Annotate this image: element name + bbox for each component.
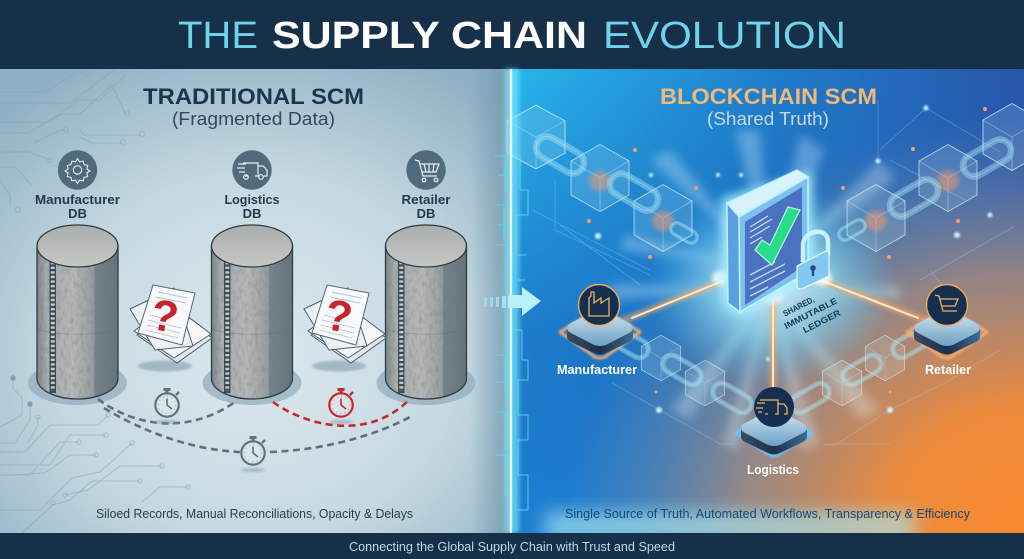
delay path: manufacturer to retailer <box>104 408 410 452</box>
caption: blockchain benefits: Single Source of Truth, Automated Workflows, Transparency & Efficiency <box>565 507 971 521</box>
label: manufacturer: Manufacturer <box>557 362 637 377</box>
label: manufacturer DB: Manufacturer <box>35 192 120 207</box>
blockchain cube row <box>507 104 1024 252</box>
orange dots <box>587 107 987 394</box>
arrow: transition <box>484 287 541 316</box>
chain links lower <box>607 325 934 416</box>
subheading: shared truth: (Shared Truth) <box>707 109 829 129</box>
label: logistics DB: DB <box>243 206 261 221</box>
icon: cart <box>935 295 958 311</box>
footer bar <box>0 533 1024 559</box>
left edge shading <box>470 69 512 533</box>
node: manufacturer <box>560 284 640 358</box>
left panel background <box>0 69 512 533</box>
label: shared immutable ledger: IMMUTABLE <box>783 296 839 331</box>
icon: document stack with question mark 2 <box>304 285 386 372</box>
label: logistics: Logistics <box>747 462 799 477</box>
icon: ledger book <box>722 170 814 318</box>
delay path: manufacturer to logistics <box>98 399 235 423</box>
lower cubes <box>641 335 905 406</box>
divider: glowing circuit line <box>495 69 528 533</box>
delay path: logistics to retailer <box>273 399 410 426</box>
title: SUPPLY CHAIN <box>272 15 587 57</box>
cylinder: logistics database <box>202 225 302 405</box>
icon: stopwatch long delay <box>241 436 265 472</box>
network lines <box>532 100 1015 445</box>
label: retailer: Retailer <box>925 362 971 377</box>
icon: padlock <box>797 232 829 289</box>
icon: factory <box>589 292 609 316</box>
right panel background <box>512 69 1024 542</box>
chain links upper <box>532 132 1015 245</box>
subheading: fragmented data: (Fragmented Data) <box>172 109 335 129</box>
caption: traditional drawbacks: Siloed Records, Manual Reconciliations, Opacity & Delays <box>96 507 413 521</box>
sparkle dots <box>595 106 992 413</box>
header bar <box>0 0 1024 69</box>
title: EVOLUTION <box>603 15 846 57</box>
label: retailer DB <box>402 192 450 221</box>
icon: green check mark <box>755 207 800 265</box>
label: shared immutable ledger: SHARED, <box>781 294 816 318</box>
label: manufacturer DB: DB <box>68 206 87 221</box>
footer tagline: Connecting the Global Supply Chain with Trust and Speed <box>349 540 675 554</box>
connection beams <box>620 270 930 390</box>
node: logistics <box>736 387 812 456</box>
icon: stopwatch red <box>329 388 353 424</box>
cylinder: manufacturer database <box>28 225 127 405</box>
label: logistics DB <box>224 192 280 221</box>
label: shared immutable ledger: LEDGER <box>801 307 843 335</box>
panel: blockchain SCM <box>507 69 1024 542</box>
circuit traces top-left <box>0 69 144 212</box>
icon: truck <box>756 400 787 414</box>
node: retailer <box>907 284 987 358</box>
title <box>178 15 846 57</box>
title: THE <box>178 15 258 57</box>
icon: gear <box>58 150 97 190</box>
heading: blockchain SCM: BLOCKCHAIN SCM <box>660 84 877 109</box>
icon: stopwatch grey <box>155 388 179 424</box>
circuit traces bottom-left <box>0 376 190 533</box>
cylinder: retailer database <box>376 225 476 405</box>
label: shared immutable ledger <box>781 294 843 335</box>
icon: cart <box>406 150 446 190</box>
panel: traditional SCM <box>0 69 512 533</box>
icon: truck <box>232 150 272 190</box>
label: retailer DB: DB <box>417 206 435 221</box>
central glow <box>647 185 897 385</box>
light rays <box>610 130 900 450</box>
label: retailer DB: Retailer <box>402 192 450 207</box>
label: logistics DB: Logistics <box>224 192 280 207</box>
heading: traditional SCM: TRADITIONAL SCM <box>143 84 364 109</box>
label: manufacturer DB <box>35 192 120 221</box>
icon: document stack with question mark <box>130 285 212 372</box>
